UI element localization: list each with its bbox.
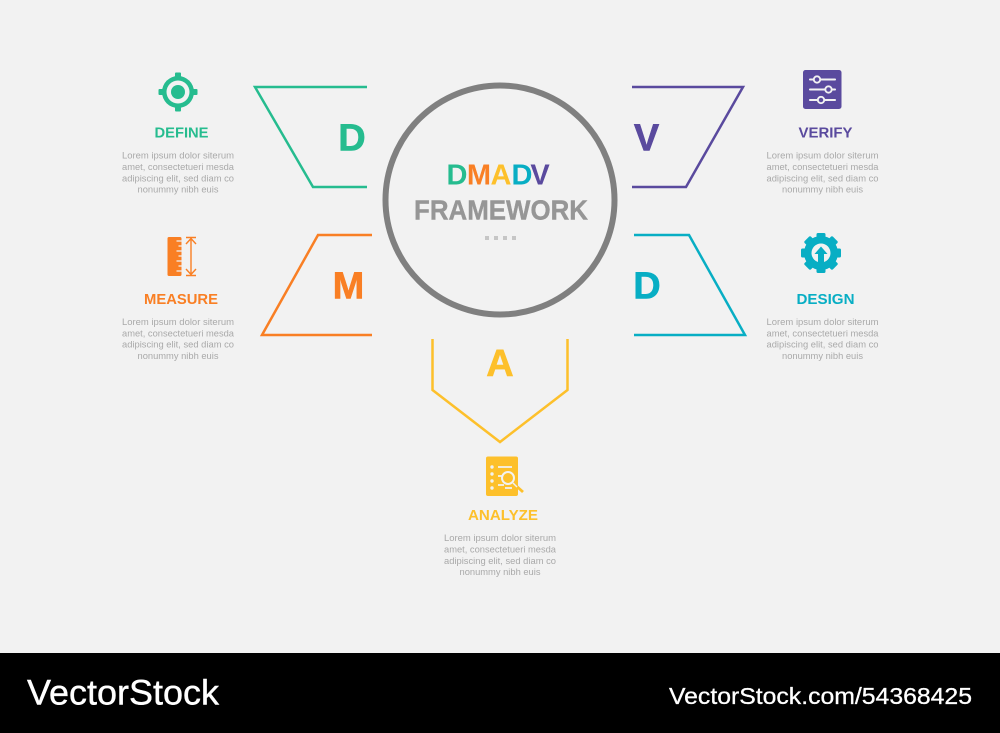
panel: verify	[632, 70, 879, 196]
title: DMADV FRAMEWORK: D	[512, 160, 532, 192]
icon: gear with arrow	[801, 233, 841, 273]
title: DMADV FRAMEWORK: V	[530, 160, 550, 192]
panel: define: adipiscing elit, sed diam co	[122, 174, 234, 184]
panel: analyze: ANALYZE	[468, 508, 538, 524]
panel: analyze: nonummy nibh euis	[460, 567, 541, 578]
panel: measure: MEASURE	[144, 292, 218, 308]
panel: design: Lorem ipsum dolor siterum	[766, 317, 878, 328]
title: DMADV FRAMEWORK: A	[491, 160, 512, 192]
panel: analyze: amet, consectetueri mesda	[444, 544, 557, 556]
panel: design: adipiscing elit, sed diam co	[766, 340, 878, 350]
panel: verify: adipiscing elit, sed diam co	[766, 174, 878, 184]
panel: analyze: A	[486, 343, 514, 385]
panel: define: D	[338, 118, 366, 160]
panel: verify: amet, consectetueri mesda	[766, 162, 879, 173]
panel: design: nonummy nibh euis	[782, 351, 863, 362]
panel: analyze: adipiscing elit, sed diam co	[444, 556, 556, 567]
panel: measure: amet, consectetueri mesda	[122, 328, 235, 340]
footer band	[0, 653, 1000, 733]
footer band: VectorStock	[27, 674, 220, 712]
icon: ruler and arrow	[168, 237, 196, 276]
footer band: VectorStock.com/54368425	[669, 683, 972, 709]
panel: design: D	[633, 266, 661, 308]
panel: design	[633, 233, 879, 362]
icon: sliders	[803, 70, 842, 109]
title: DMADV FRAMEWORK: D	[447, 160, 467, 192]
panel: verify: Lorem ipsum dolor siterum	[766, 150, 878, 162]
panel: analyze: Lorem ipsum dolor siterum	[444, 533, 556, 544]
panel: define: amet, consectetueri mesda	[122, 162, 235, 173]
panel: measure: nonummy nibh euis	[138, 351, 219, 362]
panel: measure: M	[333, 266, 364, 308]
panel: design: amet, consectetueri mesda	[766, 328, 879, 340]
title: DMADV FRAMEWORK: FRAMEWORK	[414, 194, 588, 226]
icon: target	[158, 72, 198, 112]
panel: measure: adipiscing elit, sed diam co	[122, 340, 234, 350]
panel: measure: Lorem ipsum dolor siterum	[122, 317, 234, 328]
panel: define: nonummy nibh euis	[138, 184, 219, 196]
icon: document with magnifier	[486, 456, 523, 496]
panel: define: DEFINE	[154, 126, 209, 142]
panel: define	[122, 72, 367, 196]
panel: analyze	[432, 339, 568, 578]
panel: design: DESIGN	[796, 292, 854, 308]
panel: measure	[122, 235, 372, 362]
center circle	[386, 86, 614, 314]
title: DMADV FRAMEWORK: M	[467, 160, 491, 192]
panel: verify: V	[634, 118, 660, 160]
panel: verify: VERIFY	[798, 126, 853, 142]
panel: verify: nonummy nibh euis	[782, 184, 863, 196]
panel: define: Lorem ipsum dolor siterum	[122, 150, 234, 162]
title: DMADV FRAMEWORK	[414, 160, 588, 240]
